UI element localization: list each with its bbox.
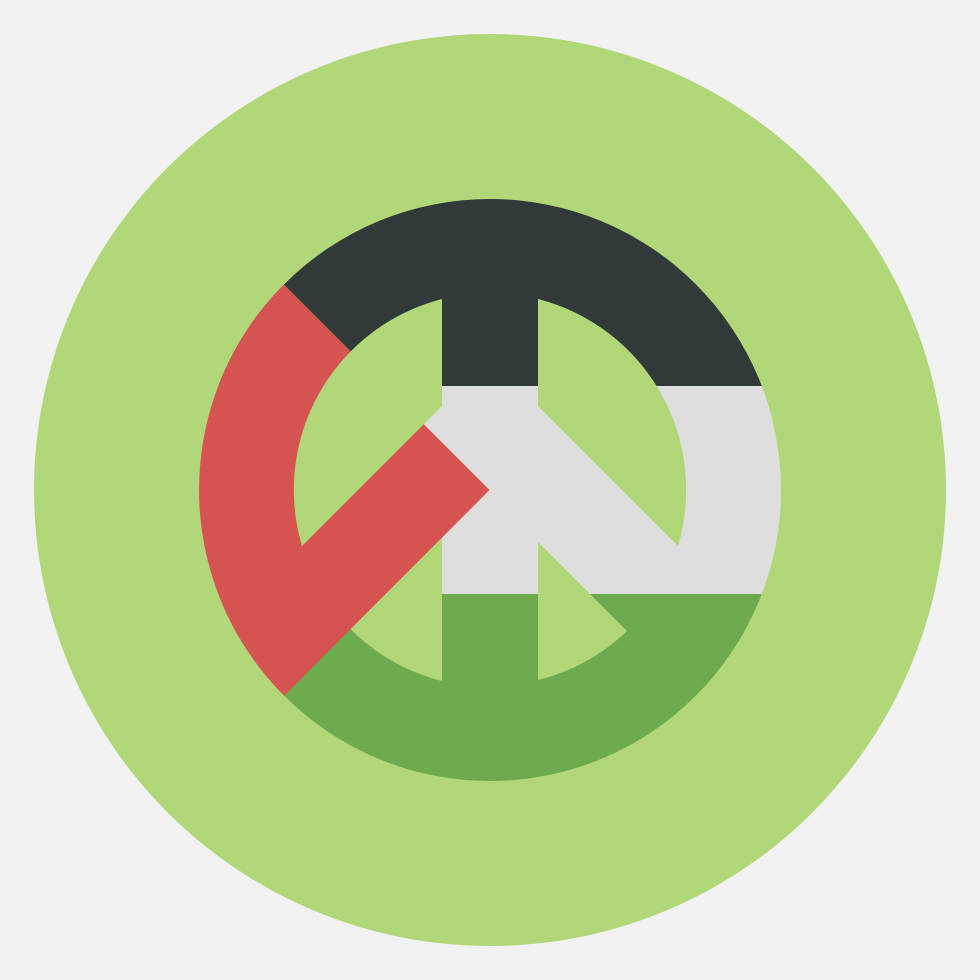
- black band: [218, 199, 762, 386]
- cut-outs between the arms: [294, 299, 686, 680]
- flag bands: [190, 190, 790, 790]
- white band: [190, 386, 790, 594]
- green band: [218, 594, 762, 781]
- upper right cut-out: [538, 299, 686, 546]
- lower right cut-out: [538, 542, 627, 680]
- lower left cut-out: [350, 538, 442, 681]
- peace symbol: [190, 190, 790, 790]
- red wedge: [199, 284, 490, 696]
- upper left cut-out: [294, 299, 442, 546]
